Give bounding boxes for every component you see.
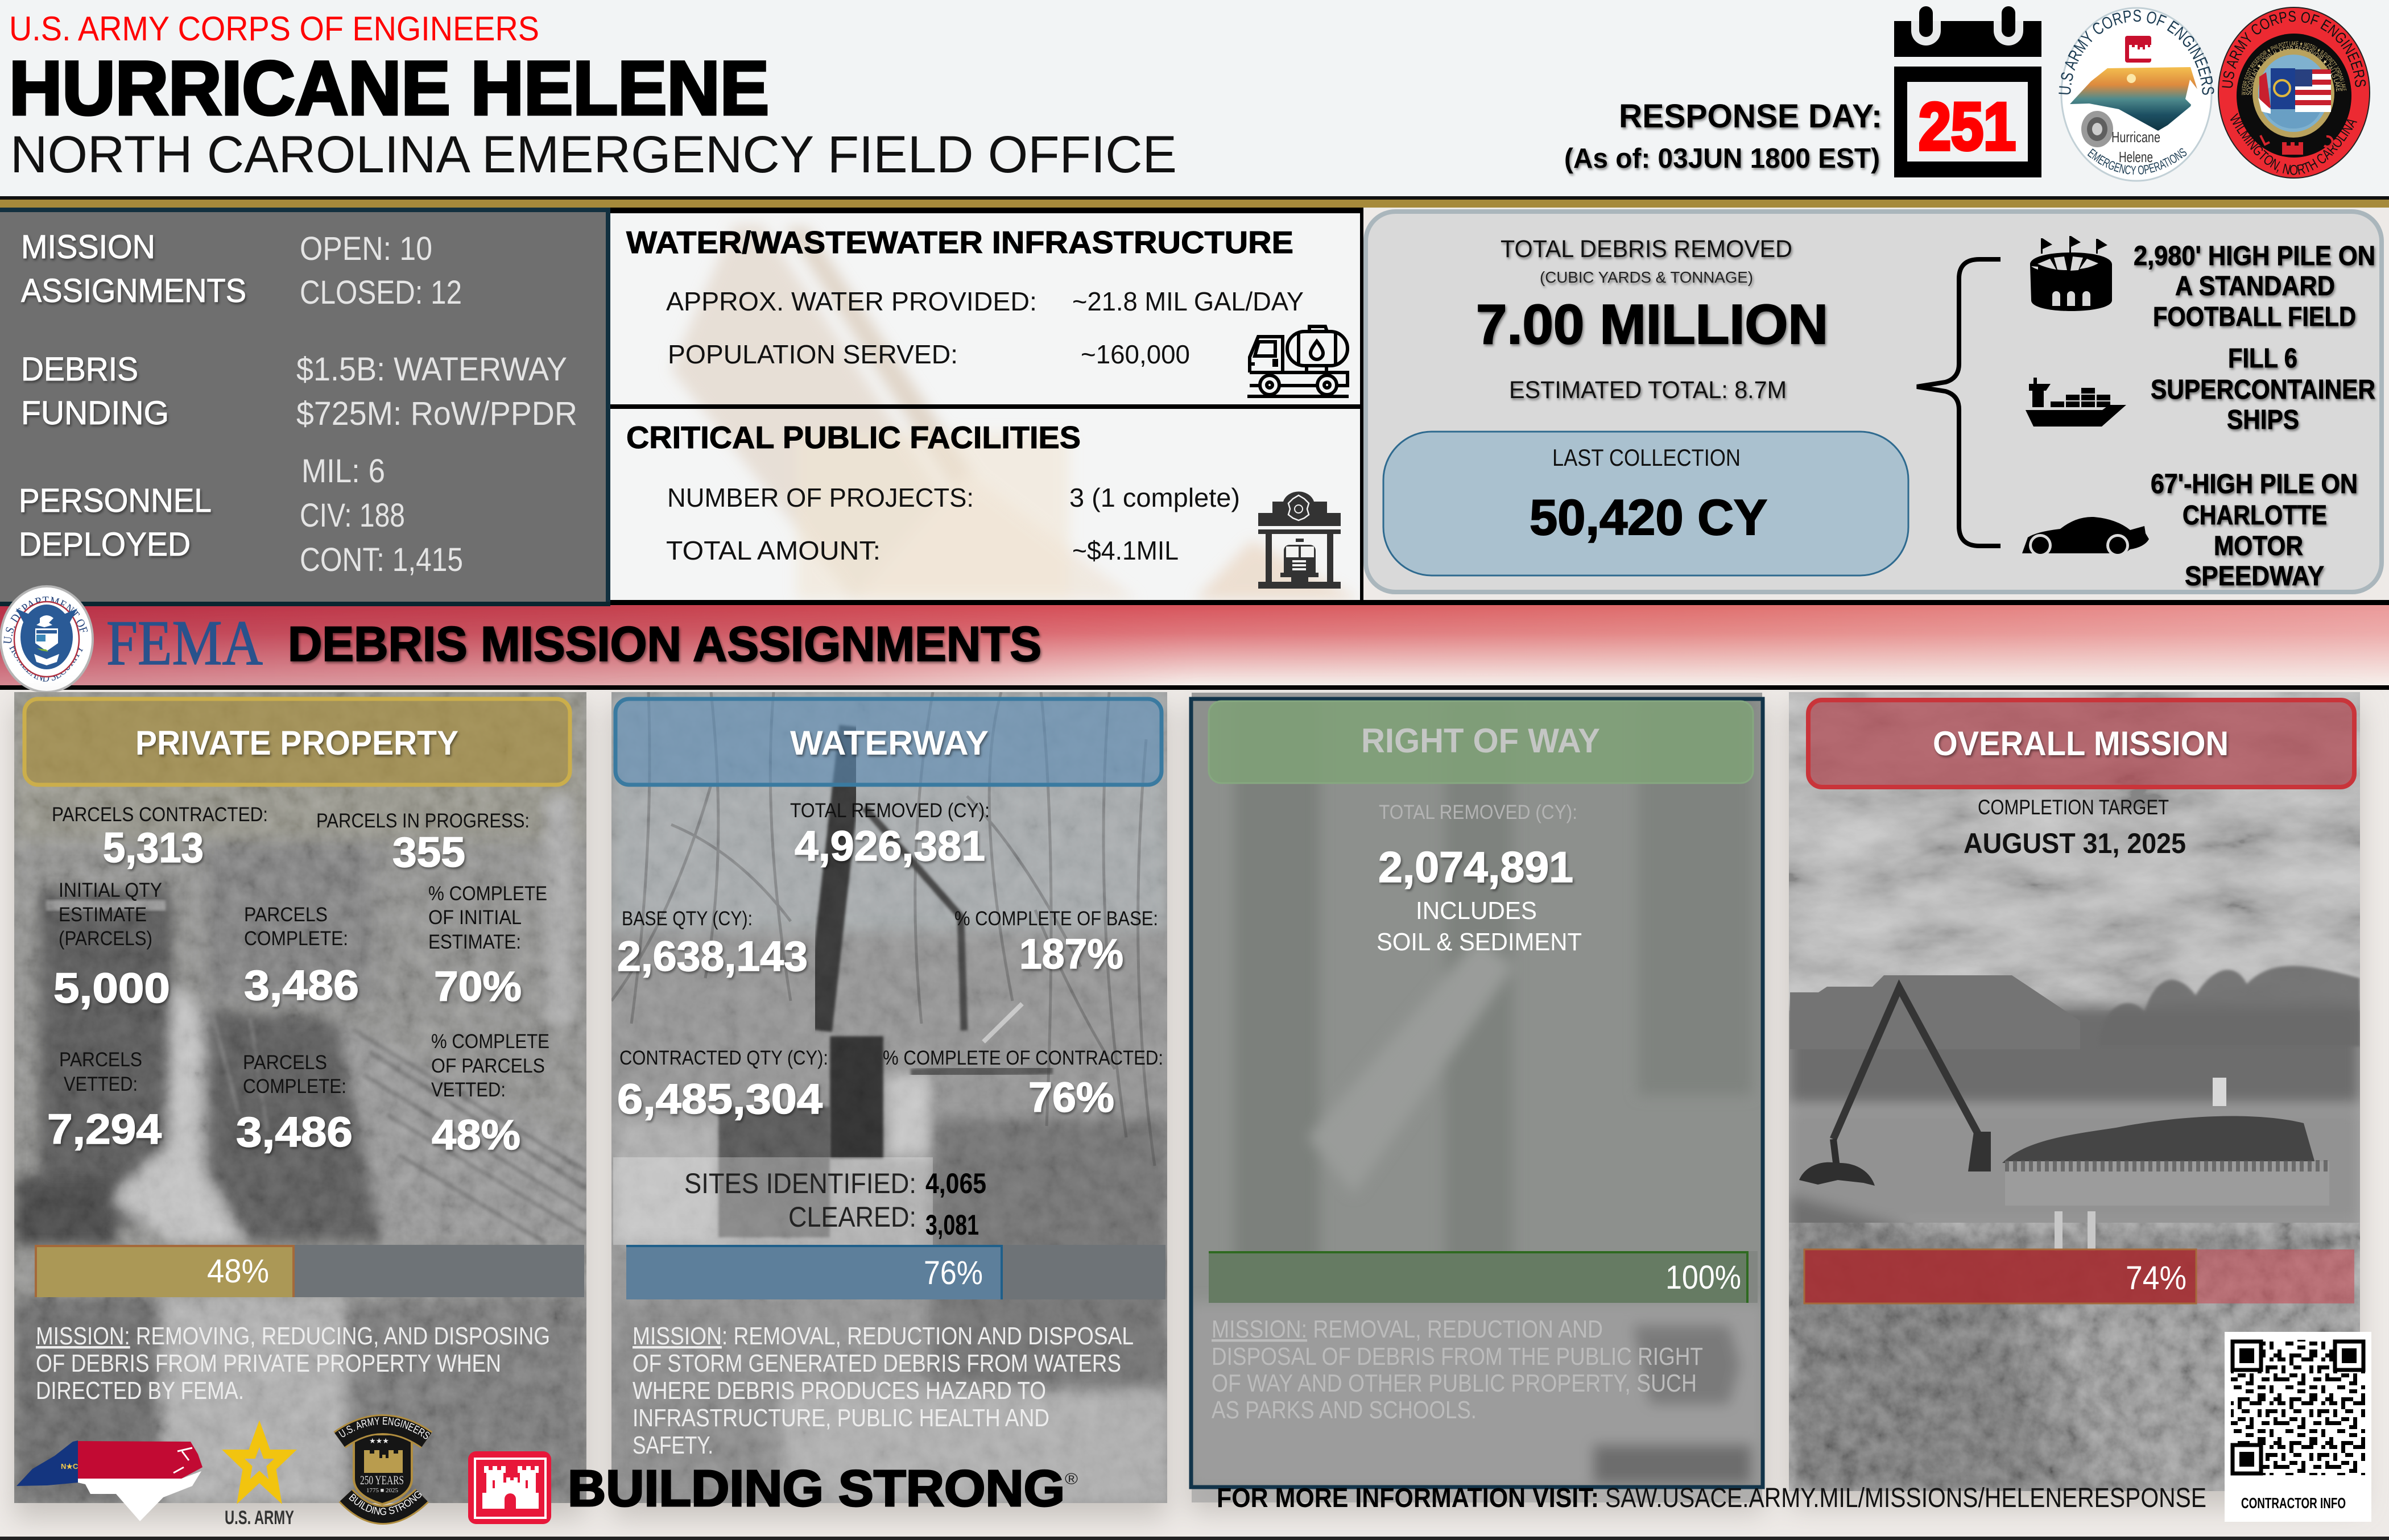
waterway stats: BASE QTY (CY):	[622, 908, 753, 930]
mission text: private property: OF DEBRIS FROM PRIVATE PROPERTY WHEN	[36, 1349, 501, 1377]
total debris stat: ESTIMATED TOTAL: 8.7M	[1509, 376, 1787, 404]
mission text: waterway: MISSION: REMOVAL, REDUCTION AND DISPOSAL	[633, 1322, 1134, 1350]
panel: private property	[14, 692, 586, 1503]
mission text: right of way	[1212, 1315, 1703, 1424]
banner: debris mission assignments	[0, 600, 2389, 690]
logo: Hurricane Helene emergency operations: Helene	[2119, 148, 2153, 165]
sites identified and cleared: 4,065	[925, 1168, 986, 1199]
icon: 250 years shield	[337, 1415, 432, 1517]
logo: Hurricane Helene emergency operations: Hurricane	[2111, 129, 2160, 146]
waterway stats: 6,485,304	[617, 1075, 822, 1123]
debris funding: DEBRIS	[21, 351, 138, 388]
water figures: APPROX. WATER PROVIDED:	[666, 287, 1037, 316]
sites identified and cleared	[613, 1157, 986, 1245]
icon: container ship	[2026, 378, 2126, 427]
facilities heading: CRITICAL PUBLIC FACILITIES	[626, 420, 1081, 455]
waterway stats: TOTAL REMOVED (CY):	[790, 800, 990, 822]
heading: private property	[24, 699, 570, 785]
container ship comparison: FILL 6	[2228, 343, 2297, 374]
icon: 250 years shield: U.S. ARMY ENGINEERS	[337, 1415, 432, 1442]
last collection callout	[1383, 432, 1908, 576]
more information line: FOR MORE INFORMATION VISIT:	[1217, 1483, 1599, 1513]
last collection callout: 50,420 CY	[1530, 489, 1767, 545]
personnel deployed	[19, 453, 463, 578]
waterway stats: 2,638,143	[617, 933, 808, 980]
water figures: ~160,000	[1081, 340, 1190, 369]
icon: 250 years shield: ★★★	[369, 1436, 389, 1445]
panel: total debris removed	[1366, 212, 2382, 592]
debris funding: $725M: RoW/PPDR	[296, 395, 577, 432]
private property stats: ESTIMATE	[59, 904, 147, 926]
logo: Wilmington district seal: W.KERR SCOTT RESERVOIR ★ PHILPOTT LAKE ★ MOTSU ★ B.EVERETT JORDAN LAKE	[2241, 40, 2347, 96]
banner heading: DEBRIS MISSION ASSIGNMENTS	[288, 617, 1041, 672]
motor speedway comparison	[2151, 469, 2358, 591]
facilities figures: TOTAL AMOUNT:	[666, 536, 881, 565]
progress bar: private property	[36, 1245, 584, 1297]
private property stats: PARCELS	[59, 1049, 142, 1071]
progress bar: overall mission	[1804, 1249, 2354, 1303]
logo: Hurricane Helene emergency operations	[2056, 7, 2217, 181]
icon: stadium	[2030, 236, 2112, 311]
private property stats: PARCELS	[244, 904, 328, 926]
waterway stats	[617, 800, 1163, 1123]
mission text: private property	[36, 1322, 550, 1405]
sites identified and cleared: 3,081	[925, 1209, 979, 1241]
heading: overall mission: OVERALL MISSION	[1933, 725, 2229, 763]
private property stats: 3,486	[236, 1108, 353, 1156]
progress bar: right of way: 100%	[1665, 1259, 1741, 1296]
facilities figures: 3 (1 complete)	[1069, 483, 1240, 512]
mission text: right of way: OF WAY AND OTHER PUBLIC PROPERTY, SUCH	[1212, 1369, 1697, 1397]
heading: overall mission	[1808, 700, 2354, 787]
main title: HURRICANE HELENE	[9, 46, 769, 131]
private property stats: INITIAL QTY	[59, 879, 162, 901]
waterway stats: 187%	[1019, 930, 1123, 978]
private property stats: 70%	[434, 963, 522, 1010]
sites identified and cleared: CLEARED:	[788, 1201, 916, 1233]
total debris stat	[1476, 235, 1828, 404]
right of way stats	[1377, 801, 1582, 956]
personnel deployed: MIL: 6	[301, 453, 385, 490]
title block	[9, 10, 1177, 184]
completion target: COMPLETION TARGET	[1978, 796, 2169, 819]
private property stats: 355	[392, 829, 465, 876]
response day	[1564, 98, 1882, 174]
water figures	[666, 287, 1304, 369]
building strong wordmark: BUILDING STRONG	[568, 1460, 1065, 1517]
mission assignments: OPEN: 10	[300, 230, 432, 267]
private property stats: VETTED:	[64, 1073, 138, 1095]
motor speedway comparison: CHARLOTTE	[2183, 500, 2327, 531]
completion target	[1964, 796, 2186, 859]
icon: North Carolina flag map	[16, 1440, 202, 1521]
private property stats: PARCELS IN PROGRESS:	[316, 810, 530, 832]
container ship comparison	[2151, 343, 2375, 435]
progress bar: overall mission: 74%	[2126, 1260, 2187, 1297]
debris funding	[21, 351, 577, 432]
QR code	[2225, 1332, 2371, 1522]
icon: 250 years shield: 1775 ■ 2025	[366, 1487, 398, 1494]
mission text: right of way: AS PARKS AND SCHOOLS.	[1212, 1396, 1477, 1424]
mission assignments	[21, 229, 462, 311]
mission text: private property: DIRECTED BY FEMA.	[36, 1377, 244, 1405]
motor speedway comparison: MOTOR	[2214, 531, 2303, 561]
heading: private property: PRIVATE PROPERTY	[135, 724, 458, 762]
mission text: private property: MISSION: REMOVING, REDUCING, AND DISPOSING	[36, 1322, 550, 1350]
mission text: waterway	[633, 1322, 1134, 1459]
organisation line: U.S. ARMY CORPS OF ENGINEERS	[9, 10, 539, 48]
progress bar: private property: 48%	[207, 1253, 269, 1290]
icon: fire station	[1258, 491, 1341, 589]
private property stats: VETTED:	[431, 1079, 506, 1101]
logo: Wilmington district seal: SOCOM AO ★ JOHN H. KERR RESERVOIR ★ FALLS LAKE	[2245, 44, 2343, 96]
progress bar: waterway: 76%	[924, 1255, 983, 1291]
icon: Department of Homeland Security seal: HOMELAND SECURITY	[7, 642, 86, 685]
mission text: waterway: WHERE DEBRIS PRODUCES HAZARD TO	[633, 1377, 1046, 1405]
private property stats: 48%	[432, 1111, 520, 1158]
football field comparison	[2134, 241, 2375, 332]
mission text: waterway: INFRASTRUCTURE, PUBLIC HEALTH AND	[633, 1404, 1049, 1432]
icon: 250 years shield: 250 YEARS	[360, 1473, 404, 1487]
icon: 250 years shield: BUILDING STRONG	[347, 1488, 424, 1517]
icon: race car	[2022, 517, 2149, 557]
photo: faded roadside	[1189, 697, 1764, 1489]
right of way stats: INCLUDES	[1416, 897, 1537, 925]
personnel deployed: PERSONNEL	[19, 482, 212, 519]
sub title: NORTH CAROLINA EMERGENCY FIELD OFFICE	[10, 126, 1177, 184]
photo: grapple machine in woods	[611, 692, 1167, 1503]
water figures: ~21.8 MIL GAL/DAY	[1072, 287, 1304, 316]
heading: waterway	[615, 699, 1162, 785]
more information line	[1217, 1483, 2206, 1513]
waterway stats: % COMPLETE OF CONTRACTED:	[883, 1047, 1163, 1069]
icon: army star: U.S. ARMY	[225, 1507, 294, 1529]
FEMA wordmark: FEMA	[106, 608, 263, 678]
panel: overall mission	[1789, 692, 2360, 1496]
private property stats: ESTIMATE:	[428, 931, 521, 953]
personnel deployed: DEPLOYED	[19, 526, 191, 563]
total debris stat: 7.00 MILLION	[1476, 293, 1828, 355]
icon: army star	[225, 1434, 294, 1529]
facilities figures: ~$4.1MIL	[1072, 536, 1179, 565]
brace	[1917, 259, 2001, 546]
mission text: waterway: SAFETY.	[633, 1431, 713, 1459]
logo: Wilmington district seal	[2218, 7, 2370, 179]
completion target: AUGUST 31, 2025	[1964, 827, 2186, 859]
icon: corps castle	[468, 1451, 551, 1524]
mission assignments: CLOSED: 12	[300, 274, 462, 311]
private property stats: OF INITIAL	[428, 906, 522, 929]
water figures: POPULATION SERVED:	[668, 340, 958, 369]
mission assignments: MISSION	[21, 229, 155, 266]
header band	[0, 0, 2389, 196]
container ship comparison: SHIPS	[2227, 405, 2299, 435]
mission text: waterway: OF STORM GENERATED DEBRIS FROM WATERS	[633, 1349, 1121, 1377]
icon: water truck	[1247, 326, 1349, 396]
facilities figures: NUMBER OF PROJECTS:	[667, 483, 974, 512]
personnel deployed: CIV: 188	[300, 497, 405, 534]
motor speedway comparison: SPEEDWAY	[2185, 561, 2324, 591]
football field comparison: A STANDARD	[2175, 271, 2335, 301]
private property stats: 7,294	[47, 1106, 162, 1153]
heading: right of way	[1209, 701, 1753, 783]
private property stats: 3,486	[244, 962, 359, 1009]
logo: Hurricane Helene emergency operations: U.S ARMY CORPS OF ENGINEERS	[2059, 10, 2214, 95]
total debris stat: (CUBIC YARDS & TONNAGE)	[1540, 268, 1753, 286]
motor speedway comparison: 67'-HIGH PILE ON	[2151, 469, 2358, 499]
progress bar: waterway	[626, 1245, 1165, 1299]
icon: Department of Homeland Security seal	[1, 586, 93, 692]
waterway stats: CONTRACTED QTY (CY):	[619, 1047, 828, 1069]
private property stats: 5,000	[53, 964, 170, 1012]
logo: Wilmington district seal: US ARMY CORPS OF ENGINEERS	[2219, 8, 2369, 89]
photo: storm debris and truck	[14, 692, 586, 1503]
icon: North Carolina flag map: N★C	[61, 1462, 78, 1471]
heading: waterway: WATERWAY	[790, 724, 989, 762]
personnel deployed: CONT: 1,415	[300, 541, 463, 578]
last collection callout: LAST COLLECTION	[1552, 444, 1741, 471]
right of way stats: SOIL & SEDIMENT	[1377, 928, 1582, 956]
panel: water and public facilities	[610, 208, 1363, 602]
more information line: SAW.USACE.ARMY.MIL/MISSIONS/HELENERESPONSE	[1605, 1483, 2206, 1513]
right of way stats: TOTAL REMOVED (CY):	[1379, 801, 1577, 823]
icon: calendar with day count: 251	[1919, 89, 2016, 164]
soft panel shadows	[14, 705, 2360, 1518]
debris funding: FUNDING	[21, 395, 169, 432]
photo: excavator on debris barge	[1789, 692, 2360, 1496]
panel: waterway	[611, 692, 1167, 1503]
waterway stats: 4,926,381	[795, 822, 985, 870]
private property stats: OF PARCELS	[431, 1055, 545, 1077]
debris funding: $1.5B: WATERWAY	[296, 351, 567, 388]
QR code: CONTRACTOR INFO	[2241, 1495, 2346, 1512]
panel: mission summary	[0, 208, 610, 606]
football field comparison: FOOTBALL FIELD	[2153, 302, 2356, 332]
private property stats: % COMPLETE	[431, 1030, 549, 1053]
facilities figures	[666, 483, 1240, 565]
mission text: right of way: DISPOSAL OF DEBRIS FROM THE PUBLIC RIGHT	[1212, 1343, 1703, 1371]
icon: Department of Homeland Security seal: U.S. DEPARTMENT OF	[1, 594, 91, 644]
waterway stats: 76%	[1028, 1074, 1114, 1121]
private property stats: COMPLETE:	[243, 1075, 346, 1098]
icon: calendar with day count	[1894, 6, 2041, 177]
waterway stats: % COMPLETE OF BASE:	[954, 908, 1158, 930]
private property stats	[47, 804, 549, 1158]
total debris stat: TOTAL DEBRIS REMOVED	[1501, 235, 1792, 263]
mission text: right of way: MISSION: REMOVAL, REDUCTION AND	[1212, 1315, 1603, 1343]
response day: (As of: 03JUN 1800 EST)	[1564, 143, 1880, 174]
water infrastructure heading: WATER/WASTEWATER INFRASTRUCTURE	[626, 225, 1293, 260]
private property stats: COMPLETE:	[244, 928, 348, 950]
logo: Wilmington district seal: WILMINGTON, NORTH CAROLINA	[2226, 111, 2360, 179]
private property stats: % COMPLETE	[428, 883, 547, 905]
sites identified and cleared: SITES IDENTIFIED:	[684, 1168, 916, 1199]
mission assignments: ASSIGNMENTS	[21, 272, 246, 309]
logo: Hurricane Helene emergency operations: EMERGENCY OPERATIONS	[2085, 145, 2189, 177]
private property stats: 5,313	[103, 824, 204, 871]
panel: right of way	[1189, 693, 1764, 1502]
private property stats: PARCELS CONTRACTED:	[52, 804, 268, 826]
progress bar: right of way	[1209, 1251, 1758, 1303]
right of way stats: 2,074,891	[1378, 843, 1573, 892]
response day: RESPONSE DAY:	[1619, 98, 1882, 135]
heading: right of way: RIGHT OF WAY	[1361, 722, 1600, 760]
building strong wordmark: ®	[1065, 1470, 1078, 1488]
private property stats: PARCELS	[243, 1051, 327, 1074]
private property stats: (PARCELS)	[59, 928, 152, 950]
